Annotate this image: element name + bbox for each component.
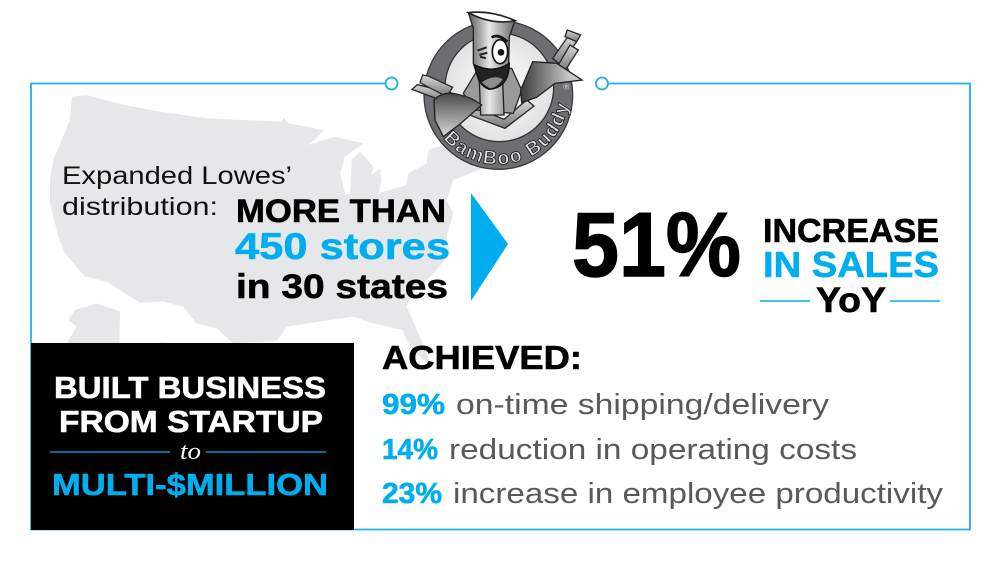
- logo wordmark: ®: [563, 82, 569, 91]
- text: stores headline: [235, 193, 450, 306]
- achievement: costs: reduction in operating costs: [449, 434, 857, 466]
- background map of the United States: [50, 95, 487, 367]
- text: stores headline: MORE THAN: [236, 193, 446, 229]
- arrow: [471, 193, 508, 301]
- sales increase label: INCREASE: [763, 212, 939, 249]
- bamboo sticks: [412, 30, 581, 128]
- panel divider with "to": to: [180, 439, 201, 465]
- sales increase label: IN SALES: [763, 244, 939, 285]
- achieved heading: ACHIEVED:: [382, 339, 582, 376]
- big stat: 51%: 51%: [572, 195, 741, 296]
- stalk opening: [468, 12, 515, 22]
- achievement: productivity: increase in employee productivity: [453, 478, 944, 510]
- achievements list: [382, 389, 944, 510]
- mascot mouth: [475, 63, 509, 89]
- panel headline: FROM STARTUP: [59, 404, 323, 439]
- text: expanded distribution: Expanded Lowes’: [62, 162, 292, 190]
- text: expanded distribution: distribution:: [62, 193, 218, 221]
- bamboo stalk body: [468, 13, 515, 115]
- Bamboo Buddy logo: [410, 11, 584, 170]
- achievement: productivity: 23%: [382, 478, 442, 510]
- panel highlight: MULTI-$MILLION: [52, 467, 328, 502]
- mascot eye: [492, 36, 508, 64]
- cape left: [434, 93, 482, 137]
- blue frame: [31, 78, 970, 530]
- sales increase label: [760, 212, 940, 320]
- cape right: [521, 62, 582, 103]
- achievement: costs: 14%: [382, 434, 438, 466]
- text: stores headline: 450 stores: [235, 226, 450, 267]
- black panel: [31, 343, 354, 530]
- sales increase label: YoY: [816, 281, 886, 320]
- logo wordmark: BamBoo Buddy: [444, 102, 572, 165]
- mascot shirt: [463, 67, 522, 113]
- panel headline: BUILT BUSINESS: [54, 370, 326, 405]
- text: expanded distribution: [62, 162, 292, 221]
- logo disc: [424, 21, 573, 169]
- achievement: shipping: on-time shipping/delivery: [456, 389, 830, 421]
- mascot wink: [477, 47, 487, 58]
- text: stores headline: in 30 states: [236, 268, 448, 306]
- panel headline: [54, 370, 326, 439]
- achievement: shipping: 99%: [382, 389, 445, 421]
